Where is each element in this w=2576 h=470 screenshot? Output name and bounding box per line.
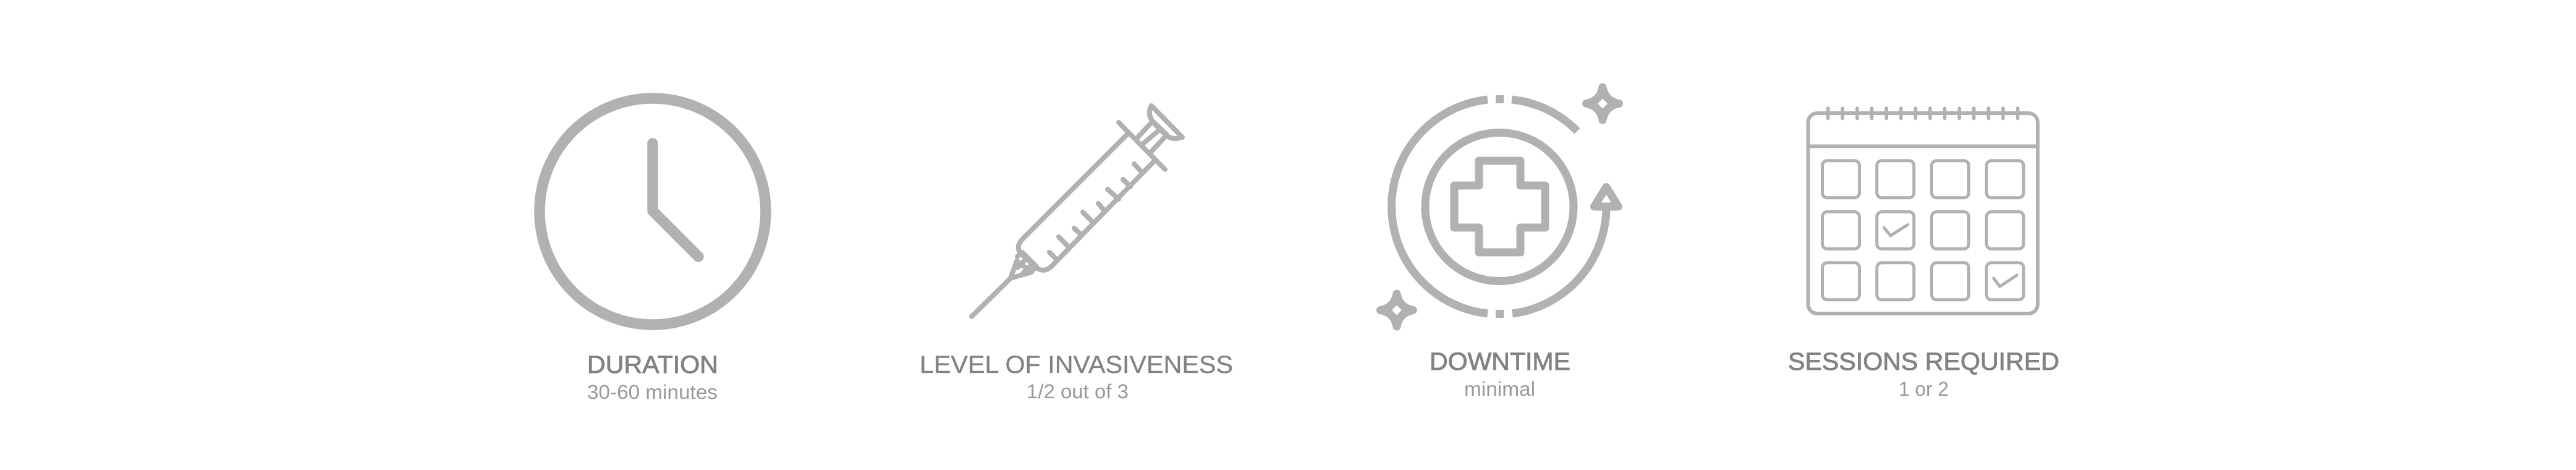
heading: downtime: DOWNTIME <box>1430 348 1570 375</box>
panel: level of invasiveness <box>920 106 1233 403</box>
icon: sparkle top right <box>1586 87 1619 120</box>
icon: sparkle bottom left <box>1381 294 1413 327</box>
heading: duration: DURATION <box>587 351 718 378</box>
value: duration: 30-60 minutes <box>587 381 718 403</box>
icon: clock <box>540 98 766 325</box>
top dash <box>1496 95 1504 103</box>
value: level of invasiveness: 1/2 out of 3 <box>1027 380 1129 403</box>
panel: duration <box>540 98 766 403</box>
binding rings <box>1828 108 2018 119</box>
value: downtime: minimal <box>1464 378 1535 400</box>
check marks <box>1884 224 2017 286</box>
outer arc lower right with arrow <box>1512 209 1606 314</box>
panel: downtime <box>1381 87 1619 400</box>
arrow head <box>1595 187 1618 207</box>
icon: recovery cycle with medical cross <box>1392 95 1618 318</box>
icon: calendar <box>1808 108 2038 314</box>
bottom dash <box>1496 310 1504 318</box>
heading: sessions required: SESSIONS REQUIRED <box>1788 348 2059 375</box>
panel: sessions required <box>1788 108 2059 400</box>
outer arc top right <box>1512 100 1577 131</box>
header line <box>1808 145 2038 148</box>
calendar body <box>1808 113 2038 314</box>
heading: level of invasiveness: LEVEL OF INVASIVENESS <box>920 351 1233 378</box>
outer arc left <box>1392 100 1488 314</box>
inner ring <box>1425 132 1574 281</box>
day grid <box>1822 161 2023 300</box>
value: sessions required: 1 or 2 <box>1899 378 1949 400</box>
icon: syringe <box>972 106 1182 317</box>
medical cross <box>1454 161 1545 252</box>
